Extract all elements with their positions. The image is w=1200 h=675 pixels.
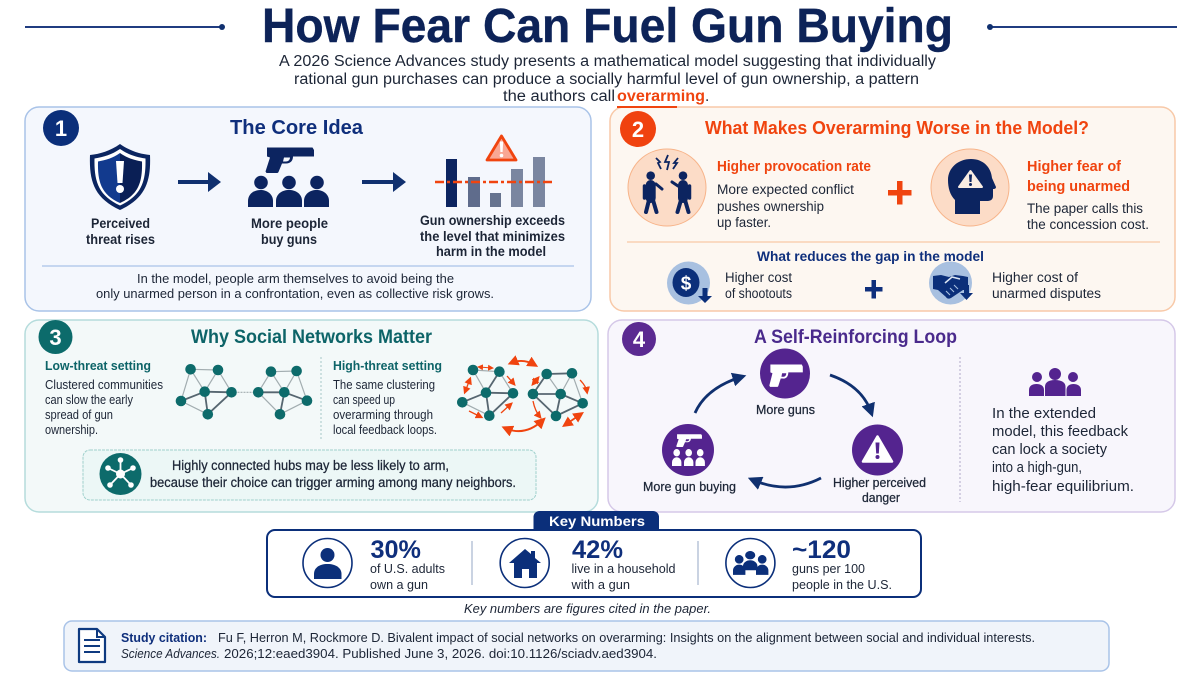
stat: 30 percent	[370, 536, 445, 592]
callout text: Highly connected hubs may be less likely to arm,	[172, 458, 449, 473]
block: higher provocation rate	[717, 159, 871, 230]
body text	[96, 271, 494, 301]
subheading: what reduces the gap: What reduces the gap in the model	[757, 248, 984, 264]
body text: only unarmed person in a confrontation, even as collective risk grows.	[96, 286, 494, 301]
badge 1: 1	[55, 116, 67, 141]
chart: ownership bars with threshold	[435, 157, 555, 207]
stat: about 120: guns per 100	[792, 562, 865, 576]
subtitle: .	[705, 88, 709, 105]
key numbers tab	[534, 511, 659, 531]
arrow	[178, 172, 221, 192]
badge 2: 2	[632, 117, 644, 142]
badge 3: 3	[49, 325, 62, 350]
heading: why social networks matter: Why Social Networks Matter	[191, 327, 433, 348]
block: higher cost of shootouts	[725, 270, 792, 301]
title rule left	[25, 24, 225, 30]
block: high-threat setting: local feedback loops.	[333, 423, 437, 437]
icon: hub network	[100, 453, 142, 495]
block: higher cost of shootouts: Higher cost	[725, 270, 792, 285]
badge 2	[620, 111, 656, 147]
block: higher fear of being unarmed: being unarmed	[1027, 179, 1130, 195]
label: more people buy guns: buy guns	[261, 232, 317, 247]
callout text	[150, 458, 516, 490]
icon: gun and people	[248, 148, 329, 207]
icon: shield	[90, 144, 150, 210]
block: higher cost of shootouts: of shootouts	[725, 286, 792, 301]
label: gun ownership exceeds: Gun ownership exceeds	[420, 213, 565, 228]
panel 2: what makes overarming worse	[610, 107, 1175, 311]
heading: a self-reinforcing loop: A Self-Reinforcing Loop	[754, 327, 957, 348]
block: higher provocation rate: pushes ownership	[717, 199, 824, 214]
block: low-threat setting	[45, 358, 163, 437]
stat: 42 percent: 42%	[572, 536, 623, 564]
stat: 30 percent: of U.S. adults	[370, 562, 445, 576]
network diagram: low threat	[176, 364, 312, 420]
block: higher provocation rate: Higher provocation rate	[717, 159, 871, 175]
plus sign	[888, 181, 912, 204]
callout text: because their choice can trigger arming among many neighbors.	[150, 475, 516, 490]
block: low-threat setting: ownership.	[45, 423, 98, 437]
label: gun ownership exceeds: harm in the model	[436, 244, 546, 259]
icon: group	[726, 538, 775, 588]
block: low-threat setting: Clustered communities	[45, 378, 163, 392]
heading: what makes overarming worse: What Makes Overarming Worse in the Model?	[705, 117, 1089, 138]
badge 1	[43, 110, 79, 146]
stat: 42 percent: live in a household	[572, 562, 676, 576]
block: high-threat setting: overarming through	[333, 408, 433, 422]
arrow: buying to guns	[695, 377, 741, 413]
icon: dollar coin with down arrow	[667, 262, 712, 304]
block: high-threat setting	[333, 358, 442, 437]
icon: two people in conflict	[628, 149, 706, 226]
panel 3: why social networks matter	[25, 320, 598, 512]
body text: In the model, people arm themselves to avoid being the	[137, 271, 454, 286]
citation text: Science Advances.	[121, 647, 220, 661]
label: more guns: More guns	[756, 403, 815, 417]
stat: 30 percent: 30%	[370, 536, 421, 564]
block: higher provocation rate: up faster.	[717, 215, 771, 230]
badge 4	[622, 322, 656, 356]
icon: higher perceived danger	[852, 424, 903, 476]
title: How Fear Can Fuel Gun Buying	[262, 0, 953, 53]
subtitle: rational gun purchases can produce a socially harmful level of gun ownership, a pattern	[294, 71, 919, 88]
label: more people buy guns	[251, 216, 328, 247]
text: extended model	[992, 406, 1134, 495]
badge 3	[38, 320, 72, 354]
block: higher fear of being unarmed: Higher fear of	[1027, 159, 1121, 175]
block: higher provocation rate: More expected conflict	[717, 182, 854, 197]
icon: more guns	[760, 348, 810, 398]
badge 4: 4	[633, 327, 646, 352]
text: extended model: into a high-gun,	[992, 460, 1082, 476]
citation text: Study citation:	[121, 631, 207, 645]
icon: dollar coin with down arrow: $	[681, 274, 692, 294]
icon: handshake with down arrow	[929, 262, 973, 304]
icon: group of people	[1029, 368, 1081, 396]
label: more people buy guns: More people	[251, 216, 328, 231]
block: high-threat setting: High-threat setting	[333, 358, 442, 373]
label: higher perceived danger	[833, 476, 926, 505]
network diagram: high threat with feedback arrows	[457, 361, 588, 431]
block: low-threat setting: spread of gun	[45, 408, 113, 422]
block: higher fear of being unarmed: the concession cost.	[1027, 217, 1149, 232]
stat: about 120	[792, 536, 892, 592]
icon: warning triangle	[487, 136, 516, 160]
label: higher perceived danger: Higher perceived	[833, 476, 926, 490]
icon: document	[79, 629, 105, 662]
label: higher perceived danger: danger	[862, 491, 900, 505]
subtitle: overarming	[617, 88, 705, 105]
label: gun ownership exceeds: the level that minimizes	[420, 229, 565, 244]
title rule right	[987, 24, 1177, 30]
text: extended model: can lock a society	[992, 442, 1108, 458]
text: extended model: In the extended	[992, 406, 1096, 422]
text: extended model: model, this feedback	[992, 424, 1129, 440]
block: low-threat setting: Low-threat setting	[45, 358, 151, 373]
label: more gun buying: More gun buying	[643, 480, 736, 494]
block: high-threat setting: The same clustering	[333, 378, 435, 392]
stat: 30 percent: own a gun	[370, 578, 428, 592]
arrow	[362, 172, 406, 192]
text: extended model: high-fear equilibrium.	[992, 479, 1134, 495]
icon: person	[303, 538, 352, 588]
plus sign	[865, 280, 882, 298]
icon: head with warning	[931, 149, 1009, 226]
block: higher cost of unarmed disputes: Higher cost of	[992, 270, 1078, 285]
stat: 42 percent: with a gun	[570, 578, 630, 592]
label: gun ownership exceeds	[420, 213, 565, 259]
footnote: Key numbers are figures cited in the paper.	[464, 602, 711, 616]
block: higher fear of being unarmed	[1027, 159, 1149, 232]
block: higher cost of unarmed disputes	[992, 270, 1101, 301]
citation text	[121, 631, 1035, 661]
label: perceived threat rises: Perceived	[91, 216, 150, 231]
subtitle: the authors call	[503, 88, 615, 105]
key numbers tab: Key Numbers	[549, 513, 645, 529]
citation text: 2026;12:eaed3904. Published June 3, 2026. doi:10.1126/sciadv.aed3904.	[224, 647, 657, 661]
arrow: guns to danger	[830, 375, 871, 412]
citation text: Fu F, Herron M, Rockmore D. Bivalent impact of social networks on overarming: Insights on the alignment between social and individual interests.	[218, 631, 1035, 645]
panel 4: a self-reinforcing loop	[608, 320, 1175, 512]
callout: highly connected hubs	[83, 450, 536, 500]
heading: the core idea: The Core Idea	[230, 117, 364, 139]
icon: house	[500, 538, 549, 588]
panel 1: the core idea	[25, 107, 591, 311]
stat: about 120: ~120	[792, 536, 851, 564]
subtitle	[279, 53, 936, 105]
citation panel	[64, 621, 1109, 671]
stat: about 120: people in the U.S.	[792, 578, 892, 592]
block: high-threat setting: can speed up	[333, 393, 395, 407]
key numbers panel	[267, 511, 921, 597]
label: perceived threat rises	[86, 216, 155, 247]
block: low-threat setting: can slow the early	[45, 393, 134, 407]
icon: more gun buying	[662, 424, 714, 476]
subtitle: A 2026 Science Advances study presents a mathematical model suggesting that individually	[279, 53, 936, 70]
block: higher cost of unarmed disputes: unarmed disputes	[992, 286, 1101, 301]
label: perceived threat rises: threat rises	[86, 232, 155, 247]
block: higher fear of being unarmed: The paper calls this	[1027, 201, 1143, 216]
stat: 42 percent	[570, 536, 676, 592]
arrow: danger to buying	[753, 478, 821, 487]
